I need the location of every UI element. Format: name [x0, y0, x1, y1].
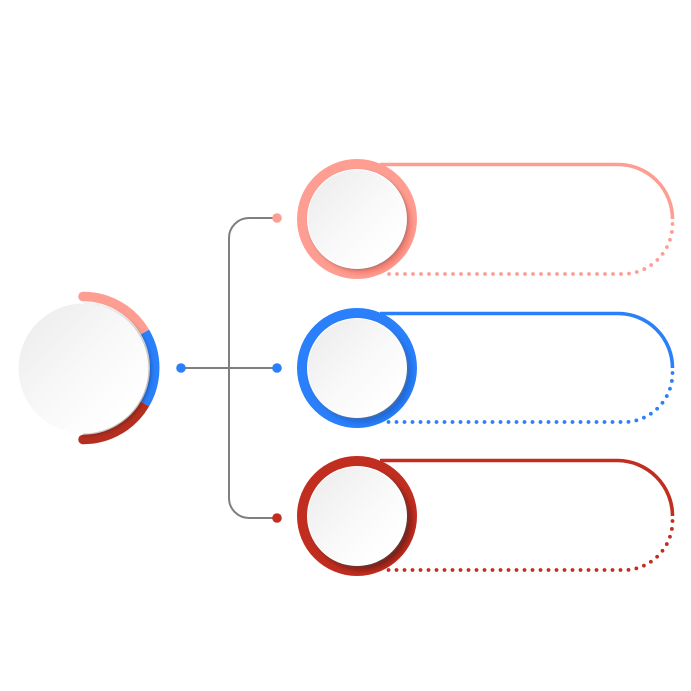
outline solid	[380, 460, 672, 516]
hub shadow	[83, 302, 154, 437]
ring	[297, 308, 417, 428]
face shadow	[308, 319, 408, 419]
hub face	[18, 304, 148, 434]
face shadow	[308, 467, 408, 567]
connector dots	[176, 213, 282, 523]
face	[307, 169, 407, 269]
outline solid	[380, 314, 672, 368]
ring inner shadow	[313, 472, 411, 570]
connector lines	[181, 218, 277, 518]
panel 2: blue	[297, 308, 673, 428]
ring	[297, 456, 417, 576]
face inner	[308, 319, 406, 417]
face inner	[308, 170, 406, 268]
outline dotted	[386, 224, 673, 274]
ring inner shadow	[322, 334, 414, 424]
panel 3: red	[297, 456, 673, 576]
face	[307, 318, 407, 418]
panel 1: pink	[297, 159, 673, 279]
arc segment: blue	[145, 332, 155, 404]
arc segment: pink rounded end	[78, 292, 88, 301]
left hub circle with segmented arc	[18, 292, 155, 444]
face shadow	[308, 170, 408, 270]
outline dotted	[386, 521, 673, 570]
arc segment: pink	[83, 296, 145, 332]
arc segment: red rounded end	[78, 435, 88, 444]
ring	[297, 159, 417, 279]
outline solid	[380, 164, 672, 219]
outline dotted	[386, 373, 673, 422]
arc segment: red	[83, 404, 145, 440]
face inner	[308, 467, 406, 565]
ring inner shadow	[313, 175, 411, 273]
face	[307, 466, 407, 566]
